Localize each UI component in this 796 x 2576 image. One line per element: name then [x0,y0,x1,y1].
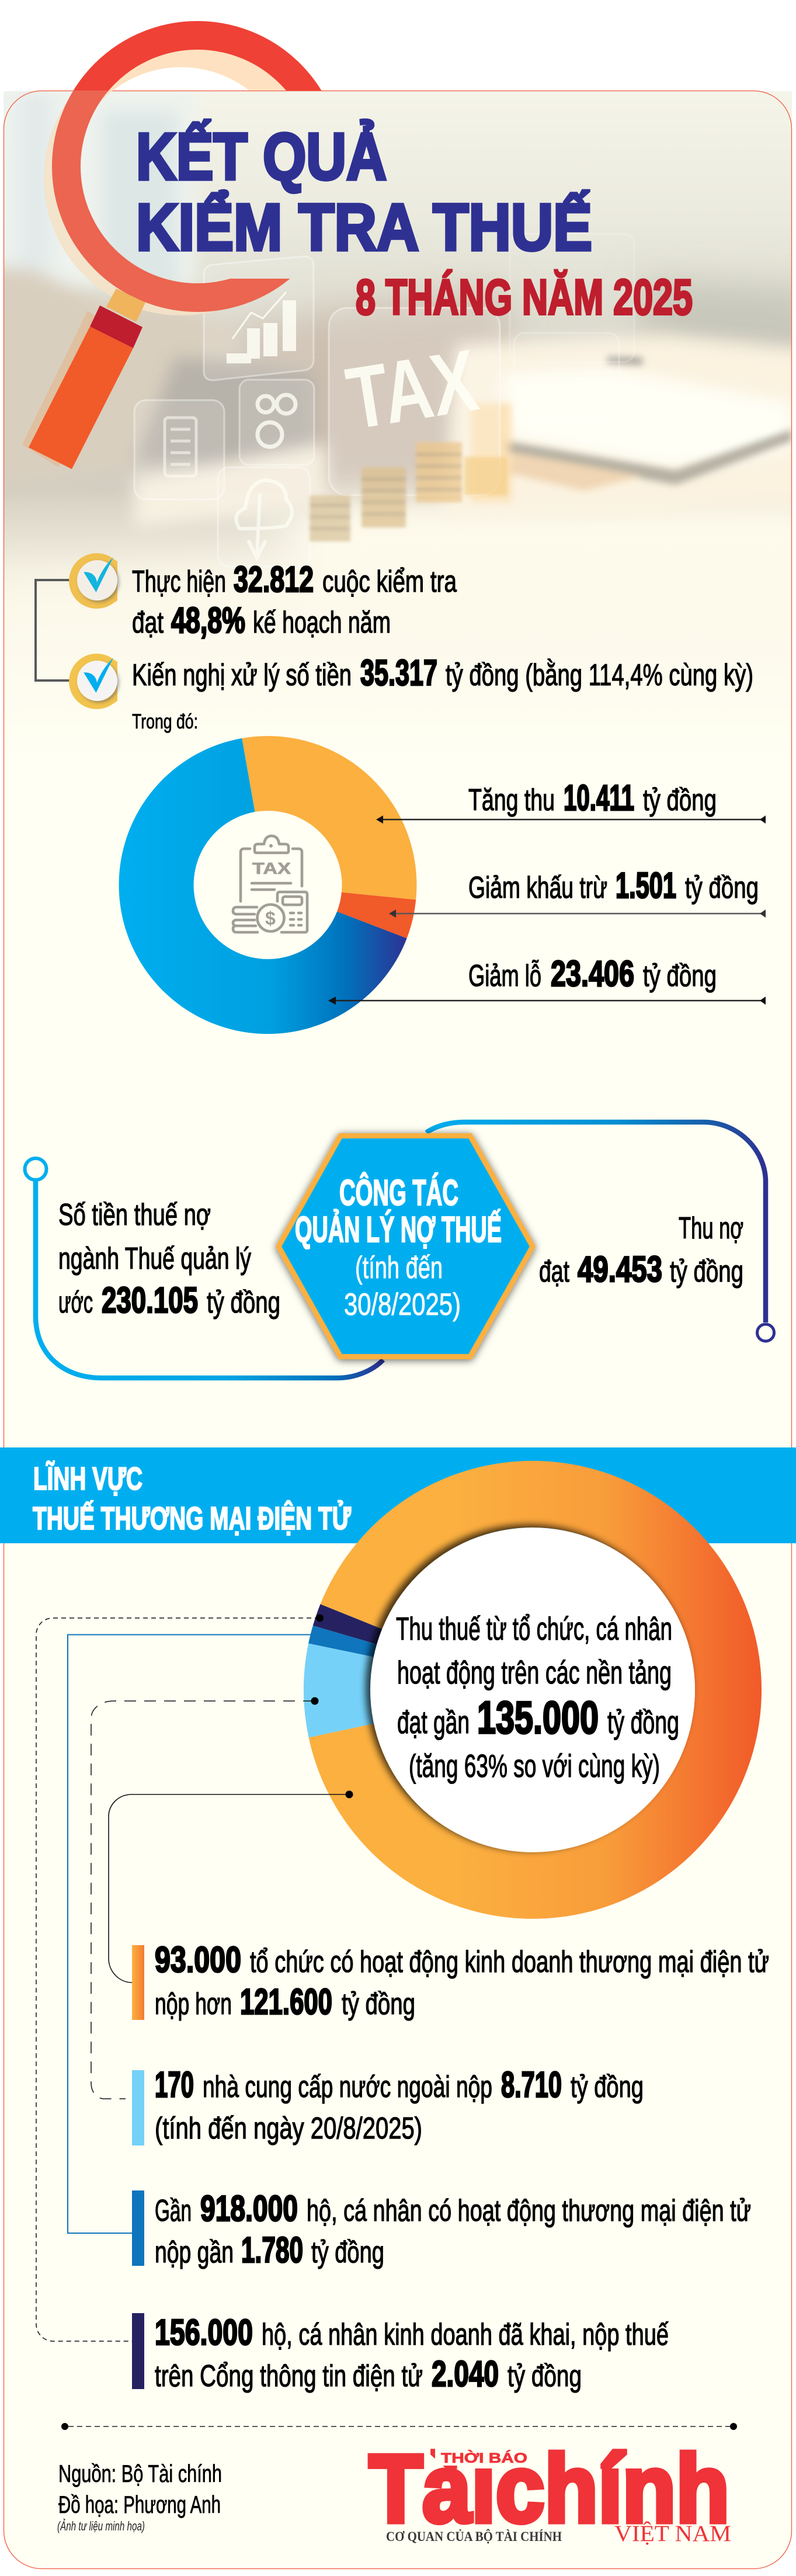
text: of which: Trong đó: [132,710,198,733]
text: inspections completed: 48,8% [171,600,245,641]
icon: bar chart on tile [227,292,296,363]
text: total collected from platforms: hoạt động trên các nền tảng [397,1654,672,1690]
text: total tax debt [58,1198,280,1321]
leader: foreign suppliers segment [91,1697,319,2099]
item: household businesses: trên Cổng thông tin điện tử [155,2359,423,2393]
text: debt collected [539,1211,743,1290]
label: reduced losses: 23.406 [551,954,634,994]
label: increased revenue: Tăng thu [468,783,555,817]
icon: coin stacks [310,442,508,541]
item: household businesses: 2.040 [432,2354,499,2394]
item: organisations: 121.600 [240,1982,332,2022]
hexagon: debt management heading: CÔNG TÁC [339,1173,458,1213]
hexagon: debt management heading [279,1136,533,1356]
item: foreign suppliers: 170 [155,2065,194,2105]
label: reduced losses: Giảm lỗ [468,959,541,993]
item: households and individuals: tỷ đồng [311,2235,384,2269]
banner: e-commerce tax section: LĨNH VỰC [33,1460,142,1497]
leader: reduced deduction [389,909,766,918]
logo: Thời báo Tài chính Việt Nam: CƠ QUAN CỦA BỘ TÀI CHÍNH [386,2529,562,2544]
label: increased revenue: 10.411 [564,778,634,818]
icon: cloud on tile [236,480,292,558]
title [136,120,592,264]
text: proposed handling amount: 35.317 [360,653,437,693]
background photo: hand and tax icons on desk [4,91,792,619]
connector: left debt curve [25,1158,383,1378]
banner: e-commerce tax section [0,1447,796,1543]
logo: Thời báo Tài chính Việt Nam: Tàichính [369,2435,729,2542]
text: total collected from platforms: tỷ đồng [607,1704,679,1740]
item: foreign suppliers: (tính đến ngày 20/8/2025) [155,2112,422,2145]
item: organisations [132,1940,769,2022]
source credits: Nguồn: Bộ Tài chính [58,2460,222,2487]
text: total tax debt: ngành Thuế quản lý [58,1242,251,1276]
icon: tax clipboard with calculator and coins: $ [265,908,276,929]
connector: right debt curve [426,1122,774,1341]
item: household businesses [132,2313,669,2394]
label: reduced deduction [468,866,759,906]
label: reduced losses: tỷ đồng [643,959,717,993]
text: total collected from platforms: (tăng 63% so với cùng kỳ) [409,1748,660,1784]
icon: tax clipboard with calculator and coins: TAX [252,859,291,877]
text: total collected from platforms [396,1610,679,1784]
text: total tax debt: tỷ đồng [207,1286,280,1320]
title: KIỂM TRA THUẾ [136,190,592,264]
label: increased revenue [468,778,717,818]
item: households and individuals: 918.000 [200,2189,298,2229]
text: proposed handling amount: Kiến nghị xử lý số tiền [132,658,352,692]
text: inspections completed: Thực hiện [132,565,226,599]
text: total collected from platforms: đạt gần [397,1704,470,1740]
label: increased revenue: tỷ đồng [643,783,717,817]
hexagon: debt management heading: (tính đến [355,1251,443,1285]
leader: households and individuals segment [68,1634,311,2233]
icon: magnifying glass [22,35,328,469]
donut chart: e-commerce tax collection [304,1461,762,1919]
hexagon: debt management heading: QUẢN LÝ NỢ THUẾ [295,1210,502,1250]
text: total tax debt: ước [58,1286,93,1320]
text: inspections completed: 32.812 [234,560,314,600]
text: debt collected: Thu nợ [679,1211,743,1245]
source credits: (Ảnh tư liệu minh họa) [57,2519,145,2533]
text: debt collected: đạt [539,1255,569,1289]
logo: Thời báo Tài chính Việt Nam: VIỆT NAM [614,2521,731,2546]
donut chart: proposed amounts [119,736,416,1034]
item: household businesses: tỷ đồng [508,2359,582,2393]
item: households and individuals: Gần [155,2194,192,2228]
text: inspections completed [132,560,457,641]
item: organisations: nộp hơn [155,1987,232,2021]
item: organisations: 93.000 [155,1940,241,1980]
icon: gears on tile [258,395,296,447]
text: total tax debt: Số tiền thuế nợ [58,1198,211,1232]
item: foreign suppliers: tỷ đồng [571,2070,644,2104]
footer divider [61,2423,737,2430]
item: households and individuals [132,2189,751,2271]
label: reduced deduction: tỷ đồng [685,871,759,905]
item: organisations: tỷ đồng [342,1987,415,2021]
icon: floating glass tiles [134,234,634,567]
text: debt collected: tỷ đồng [670,1255,743,1289]
icon: check badge 2 [69,654,117,709]
text: inspections completed: kế hoạch năm [253,606,391,640]
item: foreign suppliers: 8.710 [501,2065,562,2105]
icon: check badge 1 [69,553,117,609]
item: households and individuals: nộp gần [155,2235,234,2269]
text: inspections completed: cuộc kiểm tra [322,565,457,599]
leader: reduced losses [328,997,766,1005]
image word: TAX on tile: TAX [340,331,484,448]
text: total collected from platforms: 135.000 [477,1692,599,1743]
title: KẾT QUẢ [136,120,387,193]
icon: document on tile [165,418,196,476]
leader: household declarations segment [36,1615,324,2341]
item: foreign suppliers: nhà cung cấp nước ngoài nộp [203,2070,492,2104]
label: reduced losses [468,954,717,994]
leader: organisations segment [109,1791,353,1983]
label: reduced deduction: Giảm khấu trừ [468,871,607,905]
source credits: Đồ họa: Phương Anh [58,2491,221,2518]
banner: e-commerce tax section: THUẾ THƯƠNG MẠI ĐIỆN TỬ [33,1500,351,1536]
text: debt collected: 49.453 [578,1249,662,1290]
icon: tax clipboard with calculator and coins [233,836,307,932]
leader: increased revenue [376,815,766,824]
item: foreign suppliers [132,2065,644,2145]
source credits [57,2460,222,2533]
item: household businesses: 156.000 [155,2313,253,2353]
text: proposed handling amount [132,653,753,693]
item: households and individuals: 1.780 [241,2230,303,2271]
text: inspections completed: đạt [132,606,164,640]
text: total tax debt: 230.105 [102,1280,198,1321]
logo: Thời báo Tài chính Việt Nam: THỜI BÁO [441,2450,527,2466]
hexagon: debt management heading: 30/8/2025) [344,1287,461,1322]
bracket connector between check items [36,580,69,681]
label: reduced deduction: 1.501 [616,866,676,906]
